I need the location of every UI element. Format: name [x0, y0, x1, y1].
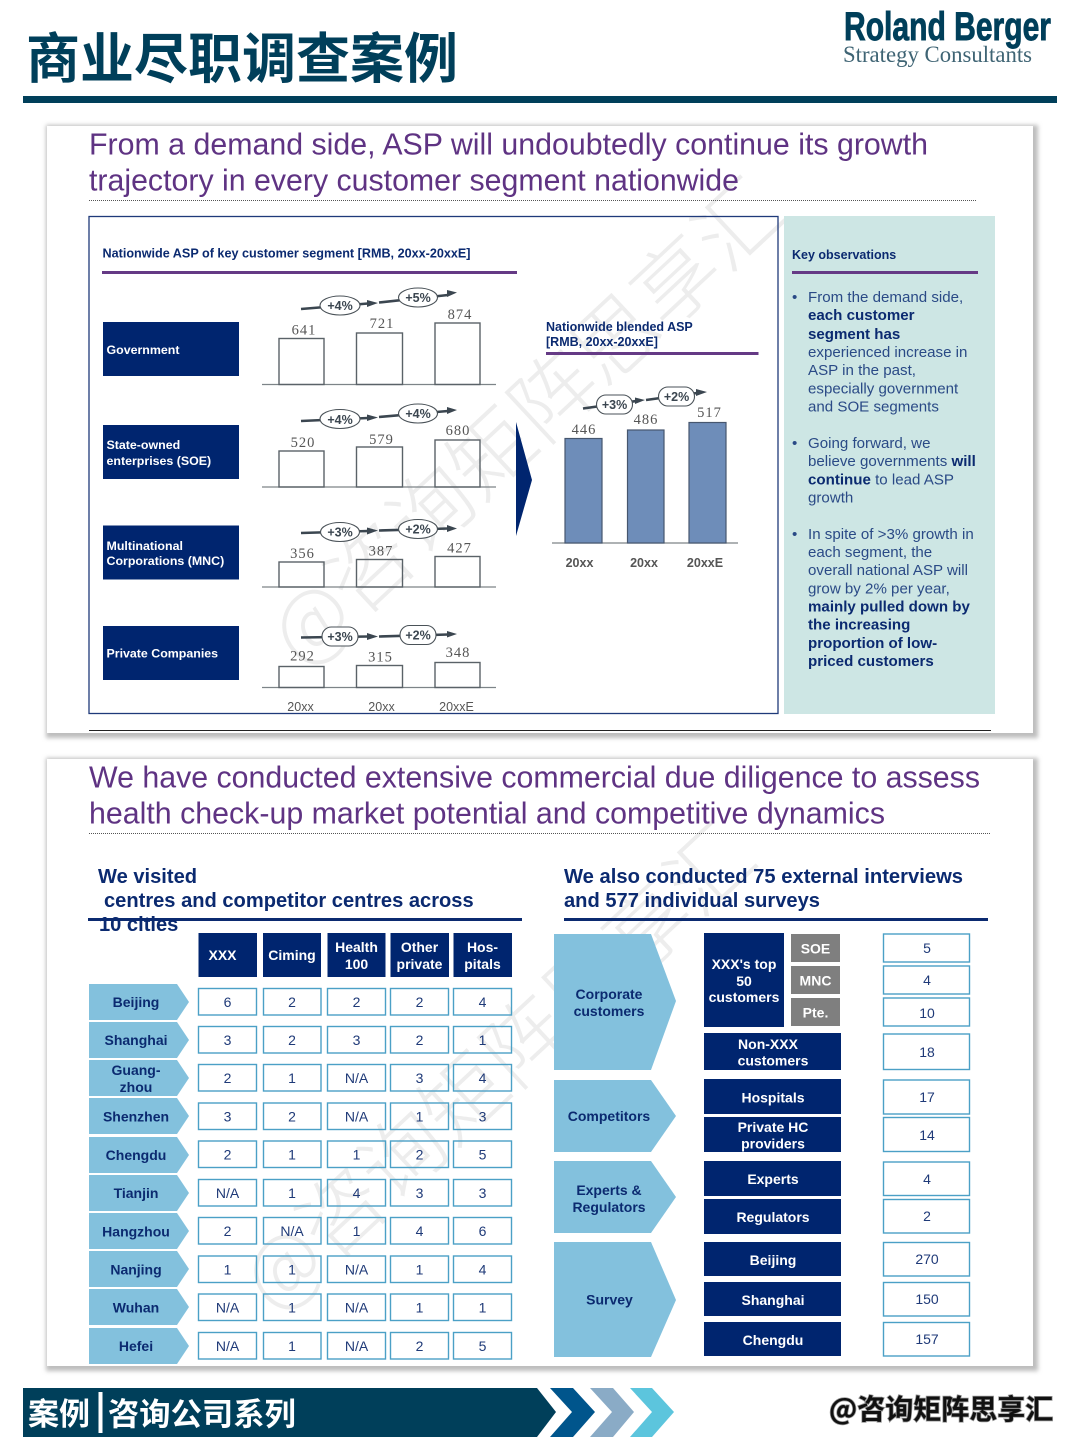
visit count table: 4	[479, 1070, 487, 1086]
blended ASP chart: 446	[572, 422, 596, 438]
segment: MNC: 427	[447, 540, 472, 556]
segment: Private Companies	[103, 626, 496, 688]
visit count table: 1	[353, 1146, 361, 1162]
interview respondent groups: customers	[709, 989, 780, 1005]
visit count table: 2	[224, 1070, 232, 1086]
table header: Other	[401, 939, 439, 955]
observation bullets: mainly pulled down by	[808, 598, 970, 616]
left heading: We visited	[98, 866, 197, 888]
year axis labels: 20xx	[287, 700, 314, 714]
city tags: Nanjing	[110, 1262, 162, 1278]
city tags: Tianjin	[114, 1185, 158, 1201]
blended ASP chart: 20xx	[630, 556, 658, 570]
interview counts: 157	[915, 1331, 939, 1347]
segment: Government: 721	[370, 316, 394, 332]
observation bullets: segment has	[808, 326, 900, 343]
segment: Private Companies: 292	[290, 648, 315, 664]
visit count table: 2	[224, 1223, 232, 1239]
slide title 2	[89, 760, 980, 830]
city tags: zhou	[120, 1079, 152, 1095]
table header: Hos-	[467, 939, 498, 955]
interview counts: 5	[923, 940, 931, 956]
segment: MNC: Multinational	[106, 539, 183, 553]
segment: SOE: State-owned	[106, 438, 180, 452]
visit count table: 1	[479, 1300, 487, 1316]
visit count table: N/A	[345, 1108, 369, 1124]
segment: MNC	[103, 520, 496, 587]
interview category arrows: Survey	[586, 1292, 633, 1308]
observation bullets: •	[792, 435, 797, 452]
interview category arrows: customers	[574, 1003, 645, 1019]
visit count table: 2	[353, 994, 361, 1010]
interview respondent groups: Hospitals	[741, 1090, 805, 1106]
visit count table: 2	[288, 1108, 296, 1124]
left heading: centres and competitor centres across	[104, 890, 474, 912]
interview category arrows: Corporate	[576, 986, 643, 1002]
visit count table: 6	[479, 1223, 487, 1239]
observation bullets: experienced increase in	[808, 344, 967, 361]
right heading	[564, 866, 963, 912]
segment: SOE	[103, 404, 496, 487]
observation bullets: From the demand side,	[808, 289, 963, 306]
observation bullets: proportion of low-	[808, 635, 937, 652]
city tags: Hefei	[119, 1338, 153, 1354]
visit count table: 4	[353, 1185, 361, 1201]
watermark 1: @咨询矩阵思享汇	[238, 147, 805, 688]
visit count table: 1	[288, 1338, 296, 1354]
segment: SOE: 579	[369, 432, 394, 448]
blended ASP chart: +3%	[602, 398, 627, 412]
observation bullets: grow by 2% per year,	[808, 580, 950, 598]
observation bullets	[792, 289, 976, 670]
visit count table: 5	[479, 1146, 487, 1162]
visit count table: 5	[479, 1338, 487, 1354]
visit count table: N/A	[345, 1070, 369, 1086]
visit count table: 2	[288, 1032, 296, 1048]
segment: MNC: 356	[290, 546, 315, 562]
interview respondent groups: Shanghai	[741, 1292, 805, 1308]
interview counts: 270	[915, 1251, 939, 1267]
interview category arrows	[554, 934, 676, 1357]
left heading: 10 cities	[99, 914, 178, 936]
interview respondent groups: Experts	[747, 1171, 799, 1187]
segment: Government: +4%	[327, 299, 353, 313]
interview counts: 14	[919, 1127, 935, 1143]
visit count table: 2	[416, 994, 424, 1010]
table header: Ciming	[268, 947, 316, 963]
segment: Private Companies: 315	[368, 650, 393, 666]
segment: MNC: 387	[369, 544, 393, 560]
footer chevrons	[550, 1388, 674, 1437]
segment: Government	[103, 288, 496, 384]
observation bullets: especially government	[808, 380, 959, 398]
interview respondent groups: Regulators	[736, 1209, 810, 1225]
interview counts: 4	[923, 972, 931, 988]
slide title 2: We have conducted extensive commercial due diligence to assess	[89, 760, 980, 794]
city tags: Beijing	[113, 994, 159, 1010]
interview counts	[884, 934, 970, 1356]
city tags: Guang-	[112, 1062, 161, 1078]
slide title 1: trajectory in every customer segment nationwide	[89, 164, 739, 198]
observation bullets: priced customers	[808, 653, 934, 670]
observation bullets: continue to lead ASP	[808, 472, 954, 488]
visit count table: 3	[353, 1032, 361, 1048]
observation bullets: •	[792, 289, 797, 306]
city tags: Shanghai	[104, 1032, 168, 1048]
visit count table: 3	[479, 1108, 487, 1124]
watermark 2: @咨询矩阵思享汇	[210, 792, 777, 1333]
table header: private	[397, 956, 443, 972]
city tags: Shenzhen	[103, 1108, 169, 1124]
visit count table: 4	[416, 1223, 424, 1239]
slide title 2: health check-up market potential and competitive dynamics	[89, 796, 885, 830]
table header: Health	[335, 939, 378, 955]
city tags: Wuhan	[113, 1300, 159, 1316]
footer label: 咨询公司系列	[108, 1390, 296, 1435]
observation bullets: believe governments will	[808, 453, 976, 470]
visit count table: 1	[353, 1223, 361, 1239]
observation bullets: growth	[808, 490, 853, 506]
visit count table: 1	[416, 1262, 424, 1278]
interview category arrows: Regulators	[572, 1199, 646, 1215]
year axis labels: 20xxE	[439, 700, 474, 714]
observation bullets: Going forward, we	[808, 435, 930, 452]
right heading: and 577 individual surveys	[564, 890, 820, 912]
blended ASP chart: +2%	[664, 390, 689, 404]
blended ASP chart: 20xx	[566, 556, 593, 570]
observation bullets: and SOE segments	[808, 398, 939, 416]
visit count table: 3	[224, 1032, 232, 1048]
visit count table: 3	[416, 1185, 424, 1201]
city tags	[89, 984, 189, 1364]
visit count table: 3	[416, 1070, 424, 1086]
visit count table: 1	[416, 1300, 424, 1316]
logo: Roland Berger	[843, 5, 1051, 68]
interview category arrows: Competitors	[568, 1108, 650, 1124]
visit count table: N/A	[216, 1338, 240, 1354]
blended ASP chart: 486	[634, 412, 658, 428]
visit count table: N/A	[280, 1223, 304, 1239]
visit count table: 2	[288, 994, 296, 1010]
table header: 100	[345, 956, 368, 972]
interview counts: 4	[923, 1171, 931, 1187]
table header	[198, 933, 512, 977]
arrow: to blended ASP	[516, 422, 532, 536]
segment: MNC: Corporations (MNC)	[106, 554, 224, 568]
city tags: Chengdu	[106, 1147, 166, 1163]
interview counts: 18	[919, 1044, 935, 1060]
interview respondent groups: SOE	[801, 940, 830, 956]
segment: SOE: 520	[291, 435, 315, 451]
interview counts: 150	[915, 1291, 939, 1307]
slide title 1	[89, 128, 928, 198]
visit count table: N/A	[345, 1262, 369, 1278]
segment: Government: 641	[292, 322, 316, 338]
observation bullets: each customer	[808, 307, 915, 324]
visit count table: 3	[224, 1108, 232, 1124]
table header: XXX	[208, 947, 237, 963]
table header: pitals	[464, 956, 501, 972]
blended ASP chart: [RMB, 20xx-20xxE]	[546, 335, 658, 349]
segment: SOE: 680	[446, 423, 470, 439]
segment: Government: +5%	[405, 291, 431, 305]
header rule	[23, 96, 1057, 103]
visit count table: 2	[416, 1146, 424, 1162]
visit count table: 1	[224, 1262, 232, 1278]
segment: Government: 874	[448, 307, 472, 323]
left heading	[98, 866, 474, 936]
interview counts: 10	[919, 1005, 935, 1021]
logo: Roland Berger: Strategy Consultants	[843, 42, 1032, 68]
visit count table: 1	[416, 1108, 424, 1124]
visit count table	[198, 988, 512, 1359]
segment: SOE: enterprises (SOE)	[106, 454, 211, 468]
visit count table: 1	[288, 1185, 296, 1201]
visit count table: N/A	[216, 1185, 240, 1201]
interview counts: 17	[919, 1089, 935, 1105]
slide title 1: From a demand side, ASP will undoubtedly continue its growth	[89, 128, 928, 162]
footer label	[28, 1389, 296, 1435]
visit count table: 4	[479, 1262, 487, 1278]
observation bullets: each segment, the	[808, 544, 932, 561]
visit count table: 2	[224, 1146, 232, 1162]
blended ASP chart: 20xxE	[687, 556, 723, 570]
interview respondent groups: customers	[738, 1052, 809, 1068]
right heading: We also conducted 75 external interviews	[564, 866, 963, 888]
footer banner	[23, 1388, 674, 1437]
panel: demand side ASP	[46, 125, 1038, 738]
interview respondent groups: Beijing	[750, 1252, 796, 1268]
panel: key observations: Key observations	[792, 248, 896, 262]
visit count table: 6	[224, 994, 232, 1010]
footer account name: @咨询矩阵思享汇	[829, 1388, 1053, 1428]
visit count table: 2	[416, 1032, 424, 1048]
year axis labels	[287, 700, 474, 714]
observation bullets: In spite of >3% growth in	[808, 526, 974, 543]
blended ASP chart	[546, 320, 758, 570]
segment: Private Companies: 348	[446, 645, 470, 661]
page title: 商业尽职调查案例	[26, 15, 458, 94]
segment: Private Companies: +2%	[405, 628, 431, 642]
visit count table: N/A	[345, 1338, 369, 1354]
observation bullets: overall national ASP will	[808, 562, 968, 579]
visit count table: 1	[479, 1032, 487, 1048]
visit count table: N/A	[216, 1300, 240, 1316]
year axis labels: 20xx	[368, 700, 395, 714]
panel: commercial due diligence	[46, 758, 1038, 1371]
visit count table: 4	[479, 994, 487, 1010]
visit count table: 1	[288, 1262, 296, 1278]
interview respondent groups	[704, 933, 841, 1356]
segment: SOE: +4%	[405, 407, 431, 421]
visit count table: 2	[416, 1338, 424, 1354]
segment: SOE: +4%	[327, 413, 353, 427]
city tags: Hangzhou	[102, 1224, 170, 1240]
segment: Private Companies: +3%	[327, 630, 353, 644]
interview respondent groups: 50	[736, 973, 752, 989]
interview respondent groups: Chengdu	[743, 1332, 803, 1348]
interview respondent groups: Non-XXX	[738, 1036, 799, 1052]
chart heading: Nationwide ASP of key customer segment [RMB, 20xx-20xxE]	[102, 246, 470, 260]
interview respondent groups: providers	[741, 1136, 805, 1152]
blended ASP chart: Nationwide blended ASP	[546, 320, 693, 334]
interview respondent groups: Pte.	[803, 1004, 828, 1020]
visit count table: N/A	[345, 1300, 369, 1316]
chart frame	[89, 216, 778, 714]
visit count table: 1	[288, 1146, 296, 1162]
observation bullets: ASP in the past,	[808, 362, 916, 379]
visit count table: 1	[288, 1070, 296, 1086]
interview respondent groups: XXX's top	[712, 956, 776, 972]
segment: MNC: +2%	[405, 522, 431, 536]
interview respondent groups: MNC	[800, 972, 831, 988]
interview counts: 2	[923, 1208, 931, 1224]
segment: MNC: +3%	[327, 526, 353, 540]
segment: Government: Government	[106, 343, 179, 357]
segment: Private Companies: Private Companies	[106, 646, 218, 660]
blended ASP chart: 517	[697, 405, 722, 421]
interview respondent groups: Private HC	[738, 1119, 808, 1135]
observation bullets: the increasing	[808, 616, 910, 634]
visit count table: 1	[288, 1300, 296, 1316]
observation bullets: •	[792, 526, 797, 543]
footer label: 案例	[28, 1389, 90, 1434]
panel: key observations	[784, 216, 995, 714]
interview category arrows: Experts &	[576, 1182, 642, 1198]
visit count table: 3	[479, 1185, 487, 1201]
